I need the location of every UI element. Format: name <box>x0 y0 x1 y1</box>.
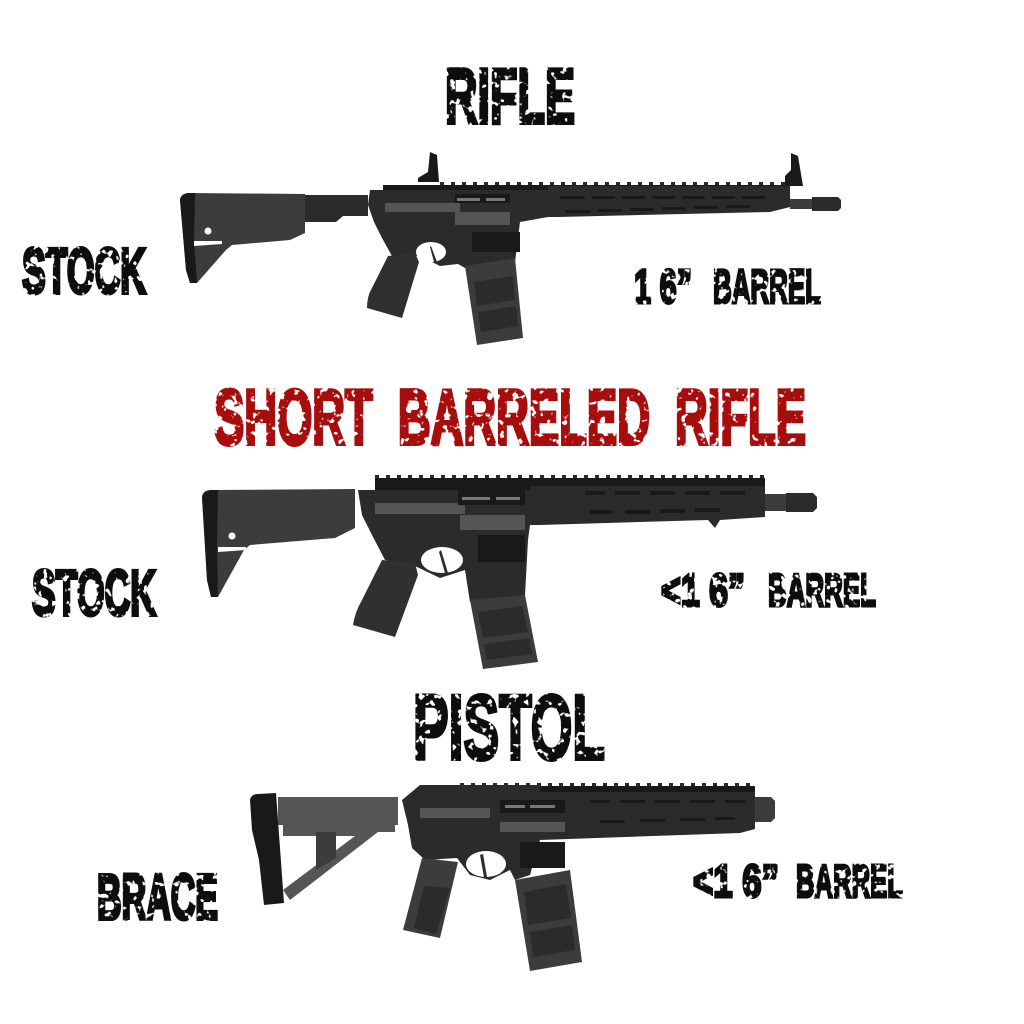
sbr barrel and muzzle <box>765 494 790 511</box>
pistol upper rail <box>420 786 755 795</box>
pistol trigger guard <box>466 851 506 877</box>
label: under 16 inch barrel: <1 6” <box>693 855 779 907</box>
label: brace: BRACE <box>97 861 218 933</box>
pistol receiver <box>402 785 540 880</box>
rifle magazine <box>465 258 523 345</box>
label: under 16 inch barrel <box>661 564 876 616</box>
rifle rear sight <box>418 152 439 182</box>
sbr grip <box>353 560 418 637</box>
pistol magazine <box>515 870 582 971</box>
label: under 16 inch barrel <box>693 855 903 907</box>
label: 16 inch barrel: BARREL <box>713 261 821 314</box>
sbr upper rail <box>375 478 765 490</box>
short barreled rifle illustration <box>202 476 817 669</box>
title: rifle: RIFLE <box>445 52 575 140</box>
sbr magazine <box>470 595 538 669</box>
pistol illustration <box>250 784 775 971</box>
label: under 16 inch barrel: BARREL <box>768 564 876 616</box>
pistol brace <box>250 793 284 905</box>
rifle grip <box>367 253 419 318</box>
pistol handguard <box>535 792 755 840</box>
label: under 16 inch barrel: <1 6” <box>661 564 745 616</box>
pistol strut <box>283 825 395 900</box>
pistol grip <box>403 858 458 938</box>
rifle front sight <box>785 153 803 186</box>
sbr receiver <box>358 490 530 602</box>
rifle buffer tube <box>305 195 368 222</box>
sbr trigger guard <box>421 547 463 573</box>
title: pistol: PISTOL <box>413 677 605 779</box>
sbr handguard <box>530 486 765 528</box>
label: under 16 inch barrel: BARREL <box>796 855 903 907</box>
rifle stock <box>180 193 305 283</box>
rifle illustration <box>180 152 841 345</box>
rifle barrel and muzzle <box>790 199 815 209</box>
pistol buffer tube <box>278 797 398 825</box>
pistol muzzle <box>755 797 775 822</box>
rifle upper rail <box>383 185 790 192</box>
sbr stock <box>202 489 355 597</box>
rifle handguard <box>548 186 790 217</box>
rifle trigger guard <box>416 242 446 262</box>
label: stock: STOCK <box>32 557 156 629</box>
label: 16 inch barrel <box>634 261 821 314</box>
label: 16 inch barrel: 1 6” <box>634 261 692 314</box>
rifle receiver <box>368 190 548 268</box>
label: stock: STOCK <box>22 235 146 307</box>
